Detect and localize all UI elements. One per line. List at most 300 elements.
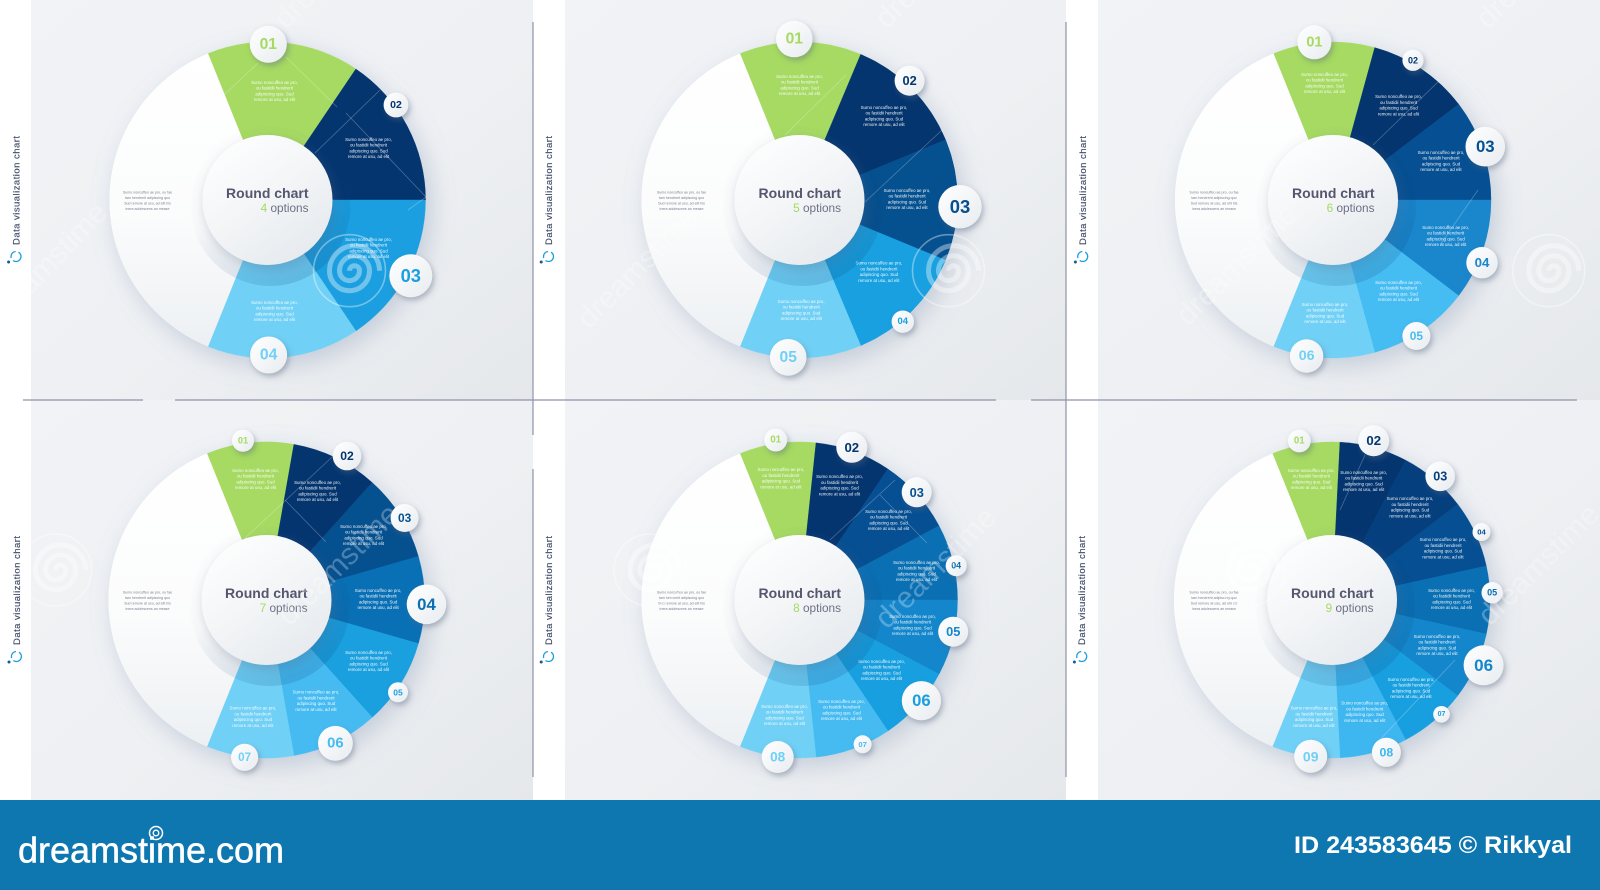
segment 03: Sumo noncuffeo ae pro, — [345, 237, 392, 242]
badge 01: 01 — [238, 436, 248, 446]
segment 02 — [800, 54, 963, 243]
segment 07 — [738, 600, 888, 772]
blank segment: Sud remore at usu, ad elit his — [1191, 602, 1238, 606]
hub: 5 options — [793, 201, 841, 215]
donut chart — [641, 12, 988, 389]
badge 03 — [1425, 462, 1455, 491]
segment 06: remore at usu, ad elit — [295, 707, 337, 712]
segment 07: Sumo noncuffeo ae pro, — [230, 705, 276, 710]
sidebar label — [540, 136, 555, 264]
segment 08: adipiscing quo. Sud — [765, 715, 804, 720]
donut chart — [109, 4, 464, 404]
segment 08: Sumo noncuffeo ae pro, — [761, 704, 808, 709]
blank segment — [108, 454, 266, 746]
badge 05 — [938, 617, 968, 647]
segment 04: ou fastidii hendrerit — [256, 306, 294, 311]
segment 04: remore at usu, ad elit — [1422, 554, 1464, 559]
segment 01: adipiscing quo. Sud — [780, 85, 819, 90]
badge 05: 05 — [393, 687, 403, 697]
blank segment: inera adolescens an mease — [660, 207, 703, 211]
segment 05: adipiscing quo. Sud — [782, 310, 821, 315]
segment 01 — [1274, 18, 1422, 200]
segment 01: remore at usu, ad elit — [779, 91, 821, 96]
badge 02: 02 — [1366, 433, 1381, 448]
segment 07: adipiscing quo. Sud — [234, 717, 273, 722]
blank segment: Sud remore at usu, ad elit his — [124, 202, 171, 206]
badge 08: 08 — [770, 750, 786, 764]
blank segment: Sud remore at usu, ad elit his — [124, 602, 171, 606]
badge 03 — [1466, 127, 1505, 166]
watermark overlay: dreamstime — [1170, 198, 1304, 332]
segment 01: ou fastidii hendrerit — [781, 80, 819, 85]
segment 05: remore at usu, ad elit — [348, 667, 390, 672]
badge 02 — [1402, 50, 1424, 71]
badge 01: 01 — [1306, 34, 1322, 50]
hub — [734, 535, 864, 665]
badge 05 — [770, 339, 806, 376]
segment 04 — [1332, 504, 1498, 653]
segment 04: Sumo noncuffeo ae pro, — [893, 560, 940, 565]
segment 06: adipiscing quo. Sud — [297, 701, 336, 706]
segment 01: remore at usu, ad elit — [235, 485, 277, 490]
badge 02: 02 — [844, 440, 859, 455]
badge 07 — [231, 744, 258, 771]
hub: Round chart — [1292, 185, 1375, 201]
blank segment: tam hendrerit adipiscing quo — [1191, 196, 1237, 200]
badge 06: 06 — [1299, 348, 1315, 364]
badge 04 — [407, 584, 446, 624]
badge 08: 08 — [1380, 745, 1393, 759]
hub — [202, 535, 332, 665]
sidebar label — [7, 136, 22, 264]
segment 05: remore at usu, ad elit — [892, 631, 934, 636]
hub: Round chart — [1291, 585, 1374, 601]
segment 05: ou fastidii hendrerit — [1380, 286, 1418, 291]
segment 01 — [208, 4, 389, 200]
badge 03: 03 — [1433, 469, 1447, 483]
panel: round chart 4 options — [7, 4, 464, 404]
segment 05: ou fastidii hendrerit — [350, 656, 388, 661]
badge 05: 05 — [780, 349, 797, 366]
panel: round chart 9 options — [1073, 425, 1504, 773]
segment 01: Sumo noncuffeo ae pro, — [1288, 468, 1335, 473]
segment 08: Sumo noncuffeo ae pro, — [1341, 700, 1388, 705]
badge 03 — [391, 504, 419, 532]
sidebar label: Data visualization chart — [1078, 136, 1089, 245]
badge 02 — [836, 432, 867, 463]
watermark overlay: dreamstime — [272, 498, 406, 632]
segment 01 — [740, 12, 903, 200]
segment 03: ou fastidii hendrerit — [1422, 156, 1460, 161]
badge 02: 02 — [1408, 55, 1418, 65]
segment 01: adipiscing quo. Sud — [236, 479, 275, 484]
segment 09: adipiscing quo. Sud — [1295, 717, 1334, 722]
blank segment — [1175, 54, 1333, 346]
badge 08 — [762, 741, 794, 773]
segment 06: adipiscing quo. Sud — [862, 670, 901, 675]
footer logo: dreamstime.com — [18, 830, 284, 870]
segment 01: ou fastidii hendrerit — [256, 86, 294, 91]
badge 04 — [892, 310, 914, 333]
blank segment — [641, 54, 800, 346]
segment 05: ou fastidii hendrerit — [894, 620, 932, 625]
sidebar label — [8, 536, 23, 664]
segment 08: remore at usu, ad elit — [1344, 718, 1386, 723]
segment 05: adipiscing quo. Sud — [349, 661, 388, 666]
blank segment: Sumo noncuffeo ae pro, ou fae — [1189, 190, 1239, 194]
segment 09 — [1266, 600, 1340, 761]
segment 03: adipiscing quo. Sud — [1391, 508, 1430, 513]
sidebar label — [1073, 536, 1088, 664]
segment 05: Sumo noncuffeo ae pro, — [778, 299, 825, 304]
badge 04: 04 — [417, 595, 436, 614]
segment 03: adipiscing quo. Sud — [888, 199, 927, 204]
segment 07 — [184, 600, 294, 770]
segment 07: ou fastidii hendrerit — [1392, 683, 1430, 688]
segment 06: remore at usu, ad elit — [1416, 651, 1458, 656]
segment 05: adipiscing quo. Sud — [893, 625, 932, 630]
hub: Round chart — [759, 585, 841, 601]
segment 03: ou fastidii hendrerit — [1391, 502, 1429, 507]
segment 01 — [207, 422, 344, 600]
segment 04: ou fastidii hendrerit — [360, 594, 397, 599]
segment 04: adipiscing quo. Sud — [1426, 236, 1465, 241]
badge 04 — [250, 336, 287, 374]
sidebar label: Data visualization chart — [12, 136, 22, 245]
segment 05: adipiscing quo. Sud — [1379, 291, 1418, 296]
segment 02 — [1332, 442, 1406, 603]
segment 03: remore at usu, ad elit — [1420, 167, 1462, 172]
badge 05: 05 — [1487, 588, 1497, 598]
segment 06: Sumo noncuffeo ae pro, — [1414, 634, 1460, 639]
segment 05 — [697, 200, 861, 389]
segment 03: remore at usu, ad elit — [1389, 514, 1431, 519]
badge 04: 04 — [260, 346, 278, 364]
segment 03: remore at usu, ad elit — [886, 205, 928, 210]
badge 06 — [318, 726, 353, 761]
sidebar label: Data visualization chart — [544, 536, 555, 645]
segment 01: adipiscing quo. Sud — [762, 479, 801, 484]
segment 02: adipiscing quo. Sud — [1379, 106, 1418, 111]
segment 05: remore at usu, ad elit — [781, 316, 823, 321]
segment 03: Sumo noncuffeo ae pro, — [884, 188, 930, 193]
badge 02: 02 — [902, 73, 917, 88]
segment 04: adipiscing quo. Sud — [255, 311, 294, 316]
segment 07: Sumo noncuffeo ae pro, — [818, 699, 865, 704]
segment 05: remore at usu, ad elit — [1378, 297, 1420, 302]
segment 08: adipiscing quo. Sud — [1346, 712, 1384, 717]
segment 02 — [266, 444, 376, 615]
badge 05: 05 — [946, 624, 960, 639]
blank segment: inera adolescens an mease — [126, 207, 169, 211]
blank segment: inera adolescens an mease — [126, 607, 169, 611]
segment 02: adipiscing quo. Sud — [349, 148, 388, 153]
segment 02: ou fastidii hendrerit — [1380, 100, 1418, 105]
blank segment: Sud remore at usu, ad elit his — [658, 602, 705, 606]
segment 01: remore at usu, ad elit — [1291, 485, 1333, 490]
badge 07 — [1433, 706, 1450, 723]
segment 02: Sumo noncuffeo ae pro, — [1375, 94, 1422, 99]
segment 04: adipiscing quo. Sud — [359, 599, 398, 604]
badge 01 — [1288, 430, 1311, 452]
hub — [1268, 135, 1398, 265]
segment 03: Sumo noncuffeo ae pro, — [1387, 496, 1433, 501]
blank segment: Sumo noncuffeo ae pro, ou fae — [123, 190, 172, 194]
blank segment: Sumo noncuffeo ae pro, ou fae — [1189, 590, 1239, 594]
segment 08: remore at usu, ad elit — [764, 721, 806, 726]
segment 06 — [204, 600, 372, 773]
segment 04: Sumo noncuffeo ae pro, — [1420, 537, 1466, 542]
badge 01 — [764, 428, 787, 452]
footer bar — [0, 800, 1600, 890]
badge 03 — [902, 477, 932, 507]
segment 02: Sumo noncuffeo ae pro, — [294, 480, 341, 485]
hub: 4 options — [261, 201, 309, 215]
segment 03: ou fastidii hendrerit — [888, 194, 926, 199]
segment 02: remore at usu, ad elit — [1343, 487, 1385, 492]
blank segment: inera adolescens an mease — [660, 607, 703, 611]
badge 01 — [776, 21, 813, 57]
badge 04 — [1472, 523, 1490, 541]
segment 01: Sumo noncuffeo ae pro, — [776, 74, 823, 79]
badge 03: 03 — [398, 511, 412, 525]
segment 06: remore at usu, ad elit — [1304, 319, 1346, 324]
sidebar label — [1074, 136, 1089, 264]
segment 01: Sumo noncuffeo ae pro, — [758, 467, 804, 472]
segment 09: Sumo noncuffeo ae pro, — [1291, 705, 1337, 710]
segment 01: Sumo noncuffeo ae pro, — [1301, 72, 1348, 77]
segment 05: remore at usu, ad elit — [1431, 605, 1473, 610]
segment 06: Sumo noncuffeo ae pro, — [293, 689, 339, 694]
segment 05: adipiscing quo. Sud — [1432, 599, 1471, 604]
segment 04: adipiscing quo. Sud — [860, 272, 899, 277]
segment 02: Sumo noncuffeo ae pro, — [345, 137, 392, 142]
segment 03 — [266, 483, 434, 656]
badge 02 — [895, 66, 925, 96]
segment 04: Sumo noncuffeo ae pro, — [1422, 225, 1469, 230]
badge 01: 01 — [1294, 436, 1305, 446]
badge 01: 01 — [786, 30, 803, 48]
segment 03: Sumo noncuffeo ae pro, — [1418, 150, 1464, 155]
badge 01: 01 — [260, 36, 277, 53]
segment 04: ou fastidii hendrerit — [898, 566, 936, 571]
badge 06 — [1464, 645, 1504, 685]
badge 01 — [250, 26, 287, 63]
segment 01: remore at usu, ad elit — [254, 97, 296, 102]
segment 06: remore at usu, ad elit — [861, 676, 903, 681]
segment 07: remore at usu, ad elit — [232, 723, 274, 728]
segment 02: ou fastidii hendrerit — [350, 143, 388, 148]
segment 03: remore at usu, ad elit — [348, 254, 390, 259]
segment 04: adipiscing quo. Sud — [897, 571, 936, 576]
segment 03: Sumo noncuffeo ae pro, — [340, 524, 387, 529]
segment 02 — [1333, 48, 1467, 225]
hub: 7 options — [260, 601, 308, 615]
segment 09: ou fastidii hendrerit — [1295, 711, 1333, 716]
badge 01: 01 — [770, 434, 782, 446]
badge 05 — [388, 682, 408, 702]
segment 07 — [1292, 600, 1458, 749]
badge 02: 02 — [390, 99, 402, 111]
badge 06: 06 — [912, 691, 931, 710]
panel: round chart 7 options — [8, 422, 446, 773]
hub: 8 options — [793, 601, 841, 615]
segment 04: remore at usu, ad elit — [357, 605, 399, 610]
badge 05 — [1402, 322, 1430, 350]
badge 07: 07 — [858, 740, 867, 749]
segment 04: ou fastidii hendrerit — [860, 266, 898, 271]
segment 02: Sumo noncuffeo ae pro, — [1340, 470, 1387, 475]
segment 02: ou fastidii hendrerit — [865, 111, 903, 116]
hub — [1267, 535, 1397, 665]
badge 02 — [384, 93, 408, 117]
segment 05: Sumo noncuffeo ae pro, — [889, 614, 936, 619]
hub: Round chart — [759, 185, 841, 201]
segment 04: ou fastidii hendrerit — [1427, 231, 1465, 236]
segment 01: Sumo noncuffeo ae pro, — [251, 80, 298, 85]
segment 03: adipiscing quo. Sud — [869, 520, 908, 525]
watermark overlay: dreamstime — [571, 201, 705, 335]
segment 06: Sumo noncuffeo ae pro, — [1302, 302, 1348, 307]
badge 06: 06 — [1474, 656, 1493, 675]
badge 03: 03 — [401, 265, 421, 286]
segment 01: ou fastidii hendrerit — [1293, 474, 1331, 479]
segment 02: ou fastidii hendrerit — [299, 486, 337, 491]
segment 01: adipiscing quo. Sud — [255, 91, 294, 96]
badge 06 — [1290, 339, 1323, 373]
segment 07: adipiscing quo. Sud — [1392, 688, 1431, 693]
donut chart — [108, 422, 441, 773]
badge 03 — [938, 185, 982, 228]
segment 08: ou fastidii hendrerit — [766, 710, 804, 715]
segment 04 — [800, 526, 974, 666]
segment 02: ou fastidii hendrerit — [1345, 476, 1383, 481]
hub — [734, 135, 864, 265]
watermark overlay: dreamstime — [869, 501, 1003, 635]
segment 05: Sumo noncuffeo ae pro, — [1375, 280, 1422, 285]
badge 02 — [333, 442, 361, 470]
segment 06 — [1318, 600, 1486, 699]
segment 04: remore at usu, ad elit — [858, 278, 900, 283]
badge 03: 03 — [1476, 137, 1495, 156]
segment 01: Sumo noncuffeo ae pro, — [232, 468, 279, 473]
blank segment — [1174, 454, 1332, 746]
donut chart — [1174, 429, 1501, 771]
segment 02 — [800, 443, 890, 608]
segment 08: ou fastidii hendrerit — [1346, 706, 1384, 711]
segment 07: adipiscing quo. Sud — [822, 710, 861, 715]
segment 02: remore at usu, ad elit — [1378, 112, 1420, 117]
segment 04: Sumo noncuffeo ae pro, — [355, 588, 401, 593]
segment 07: ou fastidii hendrerit — [234, 711, 272, 716]
segment 02: adipiscing quo. Sud — [820, 486, 859, 491]
badge 03 — [389, 254, 432, 297]
segment 03: remore at usu, ad elit — [868, 526, 910, 531]
segment 07: remore at usu, ad elit — [1390, 694, 1432, 699]
segment 03 — [268, 200, 426, 331]
segment 09: remore at usu, ad elit — [1293, 723, 1335, 728]
segment 02: ou fastidii hendrerit — [821, 480, 859, 485]
blank segment: Sumo noncuffeo ae pro, ou fae — [657, 190, 706, 194]
segment 08 — [726, 600, 816, 765]
segment 05 — [800, 600, 958, 674]
segment 01: ou fastidii hendrerit — [1306, 78, 1344, 83]
blank segment: Sud remore at usu, ad elit his — [658, 202, 705, 206]
badge 04: 04 — [898, 316, 909, 327]
segment 04: Sumo noncuffeo ae pro, — [251, 300, 298, 305]
segment 04: adipiscing quo. Sud — [1424, 549, 1463, 554]
segment 03 — [1332, 460, 1464, 631]
blank segment: Sumo noncuffeo ae pro, ou fae — [657, 590, 706, 594]
segment 02: remore at usu, ad elit — [819, 492, 861, 497]
segment 03 — [1333, 104, 1517, 276]
blank segment: tam hendrerit adipiscing quo — [659, 596, 704, 600]
segment 03: remore at usu, ad elit — [343, 541, 385, 546]
segment 04 — [757, 200, 946, 363]
segment 04: remore at usu, ad elit — [254, 317, 296, 322]
badge 09: 09 — [1303, 748, 1319, 764]
badge 07: 07 — [238, 751, 251, 764]
segment 01: ou fastidii hendrerit — [762, 473, 800, 478]
panel: round chart 8 options — [540, 426, 974, 773]
segment 02: remore at usu, ad elit — [863, 122, 905, 127]
segment 05: Sumo noncuffeo ae pro, — [1428, 588, 1475, 593]
segment 06: adipiscing quo. Sud — [1418, 645, 1457, 650]
segment 05 — [1332, 566, 1501, 665]
badge 03: 03 — [950, 196, 970, 217]
badge 02: 02 — [340, 449, 354, 463]
badge 06: 06 — [327, 735, 344, 751]
segment 05: ou fastidii hendrerit — [783, 305, 821, 310]
segment 02: remore at usu, ad elit — [297, 497, 339, 502]
segment 05: Sumo noncuffeo ae pro, — [345, 650, 392, 655]
segment 04 — [1333, 200, 1491, 296]
hub: 9 options — [1326, 601, 1374, 615]
sidebar label: Data visualization chart — [12, 536, 23, 645]
badge 04 — [946, 555, 967, 576]
hub: 6 options — [1327, 201, 1375, 215]
badge 01 — [1297, 25, 1331, 59]
sidebar label: Data visualization chart — [1077, 536, 1088, 645]
segment 03: ou fastidii hendrerit — [350, 243, 388, 248]
donut chart — [1175, 18, 1517, 378]
badge 04: 04 — [1475, 255, 1490, 270]
footer credit: ID 243583645 © Rikkyal — [1294, 832, 1572, 859]
segment 02: adipiscing quo. Sud — [1345, 481, 1383, 486]
panel: round chart 6 options — [1074, 18, 1517, 378]
segment 02 — [268, 69, 464, 273]
blank segment: inera adolescens an mease — [1192, 607, 1236, 611]
badge 02 — [1358, 425, 1389, 456]
segment 01 — [1273, 429, 1394, 600]
segment 06: Sumo noncuffeo ae pro, — [858, 659, 905, 664]
badge 07: 07 — [1438, 711, 1445, 718]
segment 03 — [800, 140, 988, 303]
blank segment: inera adolescens an mease — [1192, 207, 1236, 211]
blank segment: Sud remore at usu, ad elit his — [1191, 202, 1238, 206]
segment 01: remore at usu, ad elit — [1304, 89, 1346, 94]
badge 01 — [232, 430, 254, 452]
badge 05: 05 — [1410, 329, 1423, 343]
donut chart — [641, 426, 974, 772]
badge 08 — [1372, 738, 1401, 767]
blank segment: tam hendrerit adipiscing quo — [1191, 596, 1237, 600]
segment 08 — [1273, 600, 1406, 771]
segment 03: adipiscing quo. Sud — [349, 248, 388, 253]
segment 04: Sumo noncuffeo ae pro, — [856, 260, 902, 265]
segment 03: Sumo noncuffeo ae pro, — [865, 509, 912, 514]
segment 02: adipiscing quo. Sud — [298, 491, 337, 496]
